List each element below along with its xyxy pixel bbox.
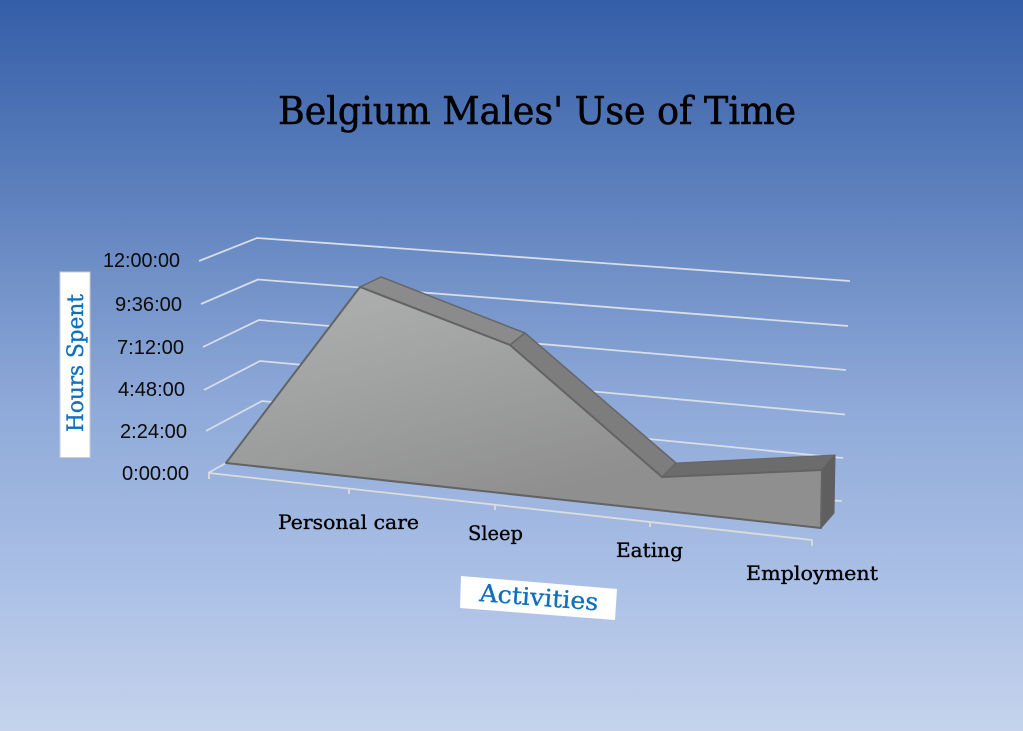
y axis labels: 4:48:00 [118, 379, 185, 401]
y axis title [60, 272, 90, 458]
category labels: Personal care [278, 510, 419, 534]
3D area chart [226, 277, 835, 528]
category labels [278, 510, 878, 585]
y axis labels: 0:00:00 [122, 463, 189, 485]
area top face: eating to employment [662, 455, 835, 477]
area top face: sleep to eating [510, 333, 676, 477]
area front face [226, 287, 822, 528]
y axis labels: 7:12:00 [117, 337, 184, 359]
area top face: personal care to sleep [360, 277, 525, 345]
y axis labels [103, 250, 189, 485]
category axis [209, 473, 812, 546]
x axis title: Activities [477, 579, 599, 616]
y axis labels: 2:24:00 [120, 421, 187, 443]
y axis labels: 12:00:00 [103, 250, 180, 272]
y axis labels: 9:36:00 [115, 294, 182, 316]
title: Belgium Males' Use of Time [278, 89, 796, 133]
area side face [821, 455, 835, 528]
x axis title [460, 576, 617, 620]
y axis title: Hours Spent [64, 294, 89, 432]
category labels: Sleep [468, 521, 523, 545]
category labels: Eating [616, 538, 683, 562]
gridlines [199, 238, 850, 501]
category labels: Employment [746, 561, 878, 585]
